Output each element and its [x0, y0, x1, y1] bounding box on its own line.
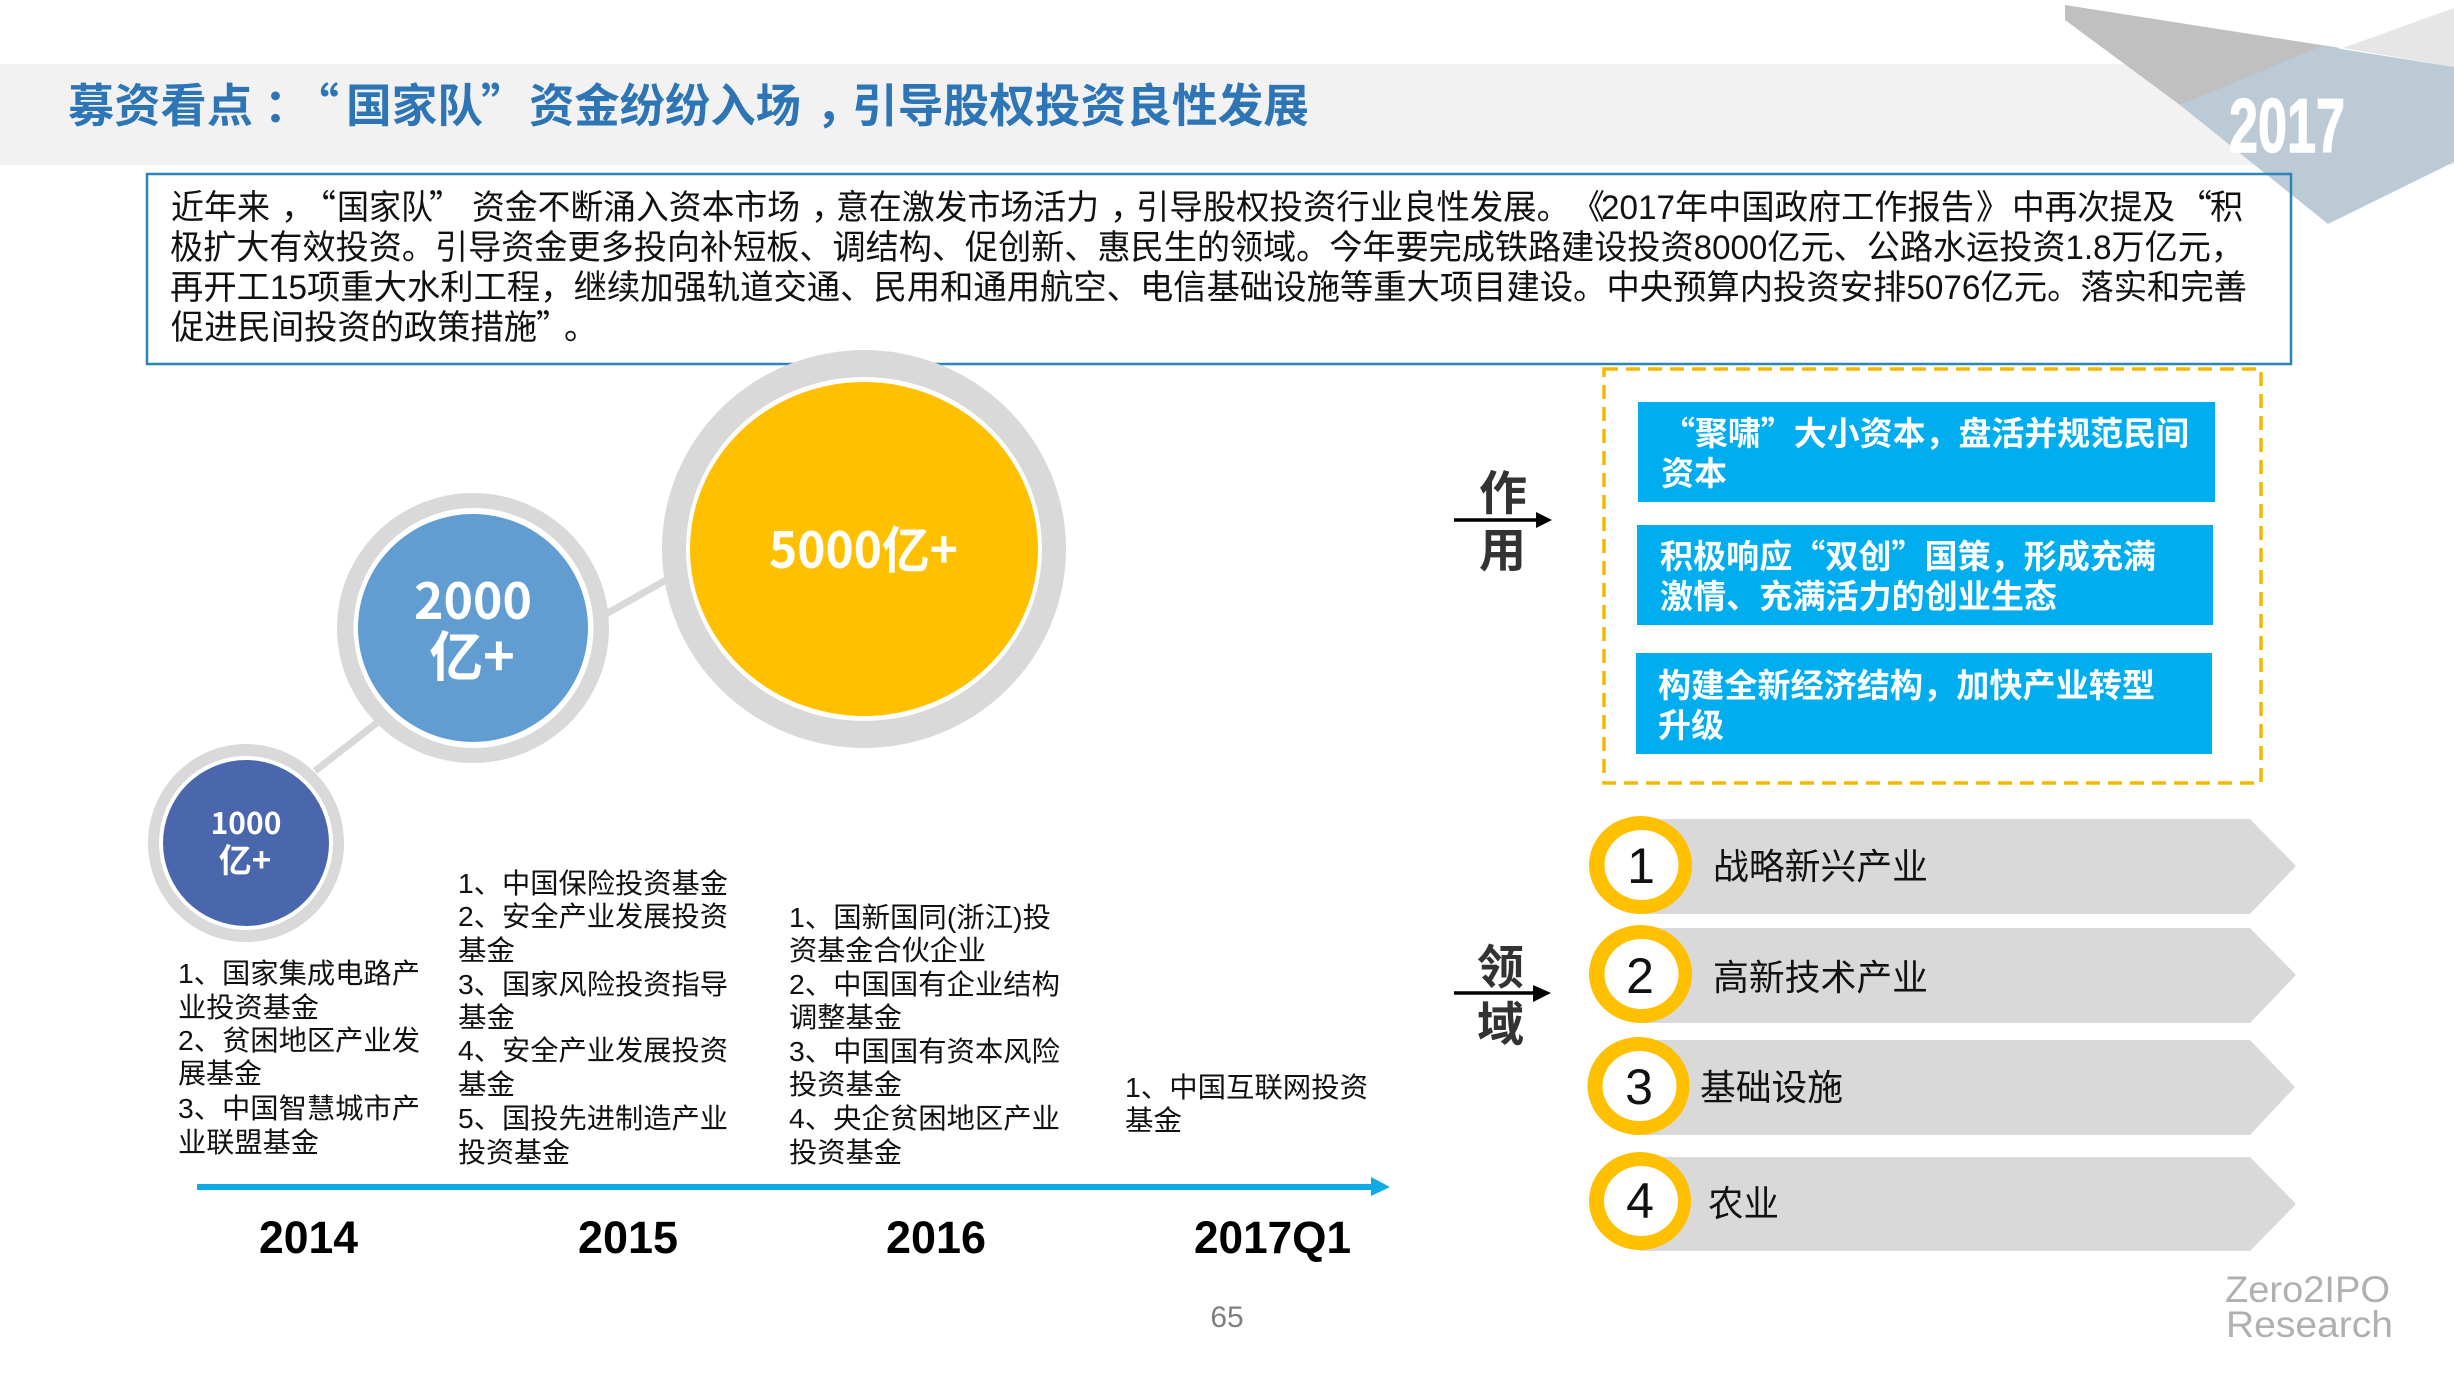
title: 资金纷纷入场 [529, 70, 801, 136]
logo: Zero2IPO Research: Research [2226, 1304, 2393, 1345]
fund list 2014: 2、贫困地区产业发 [178, 1025, 420, 1056]
title: “ [293, 70, 339, 136]
fund list 2015: 3、国家风险投资指导 [458, 969, 728, 1000]
sector row 4 [1589, 1152, 2296, 1251]
label: 作用 with arrow [1454, 455, 1552, 581]
intro paragraph [170, 180, 2247, 349]
fund list 2015: 基金 [458, 1002, 515, 1033]
label: 作用 with arrow: 用 [1479, 512, 1526, 581]
fund list 2016: 4、央企贫困地区产业 [789, 1103, 1060, 1134]
intro paragraph: “ [302, 180, 336, 229]
fund list 2016: 3、中国国有资本风险 [789, 1036, 1060, 1067]
fund list 2015: 2、安全产业发展投资 [458, 901, 728, 932]
title: 引导股权投资良性发展 [852, 70, 1309, 136]
timeline year labels [259, 1212, 1351, 1263]
fund list 2016: 资基金合伙企业 [789, 935, 986, 966]
intro paragraph: 再开工15项重大水利工程，继续加强轨道交通、民用和通用航空、电信基础设施等重大项目建设。中央预算内投资安排5076亿元。落实和完善 [170, 269, 2247, 307]
intro paragraph: ， [811, 180, 845, 229]
sector row 1: 战略新兴产业 [1713, 846, 1928, 887]
fund list 2016: 1、国新国同(浙江)投 [789, 902, 1051, 933]
decorative corner triangles [2065, 5, 2454, 224]
intro paragraph: 意在激发市场活力 [836, 189, 1099, 227]
fund list 2015: 基金 [458, 935, 515, 966]
title [68, 70, 1309, 136]
sector row 1: 1 [1627, 838, 1655, 894]
timeline year labels: 2015 [578, 1212, 678, 1263]
fund list 2016: 2、中国国有企业结构 [789, 969, 1060, 1000]
fund list 2014: 业联盟基金 [178, 1127, 319, 1158]
arrow: timeline [197, 1177, 1390, 1196]
timeline year labels: 2017Q1 [1194, 1212, 1351, 1263]
fund list 2017Q1: 1、中国互联网投资 [1125, 1072, 1368, 1103]
role card 2 [1637, 525, 2213, 625]
intro paragraph: ， [281, 180, 315, 229]
intro paragraph: 积 [2210, 189, 2243, 227]
fund list 2016: 投资基金 [789, 1069, 902, 1100]
intro paragraph: 促进民间投资的政策措施 [171, 309, 537, 347]
role card 2: 激情、充满活力的创业生态 [1660, 570, 2057, 618]
role card 3: 升级 [1658, 699, 1724, 747]
intro paragraph: ” [536, 300, 570, 349]
fund list 2017Q1: 基金 [1125, 1105, 1182, 1136]
title: ： [264, 70, 310, 136]
sector row 3: 基础设施 [1700, 1067, 1843, 1108]
fund list 2016: 调整基金 [789, 1002, 902, 1033]
timeline year labels: 2016 [886, 1212, 986, 1263]
sector row 4: 4 [1626, 1173, 1654, 1229]
intro paragraph: ， [1110, 180, 1144, 229]
fund list 2015: 基金 [458, 1069, 515, 1100]
role card 3 [1636, 653, 2212, 754]
fund list 2015: 1、中国保险投资基金 [458, 868, 728, 899]
bubble: 5000亿+ [662, 350, 1066, 748]
intro paragraph: ” [429, 180, 463, 229]
fund list 2015: 4、安全产业发展投资 [458, 1035, 728, 1066]
role card 1: 资本 [1661, 447, 1727, 495]
year badge 2017: 2017 [2229, 84, 2345, 169]
fund list 2015: 5、国投先进制造产业 [458, 1103, 728, 1134]
bubble: 1000亿+ [148, 744, 344, 942]
sector row 3: 3 [1625, 1059, 1653, 1115]
sector row 4: 农业 [1708, 1183, 1779, 1224]
title: 募资看点 [68, 70, 253, 136]
fund list 2016: 投资基金 [789, 1137, 902, 1168]
intro paragraph: “ [2178, 180, 2212, 229]
sector row 3 [1588, 1037, 2295, 1135]
logo: Zero2IPO Research: Zero2IPO [2225, 1269, 2390, 1310]
label: 领域 with arrow [1454, 929, 1551, 1055]
role card 1: “聚啸”大小资本，盘活并规范民间 [1662, 407, 2189, 455]
header band [0, 64, 2454, 165]
fund list 2014: 3、中国智慧城市产 [178, 1093, 420, 1124]
bubble: 1000亿+: 亿+ [219, 834, 271, 882]
panel: roles dashed box [1604, 369, 2261, 783]
chart: growing investment bubbles [148, 350, 1066, 942]
label: 作用 with arrow: 作 [1479, 455, 1527, 524]
role card 1 [1638, 402, 2215, 502]
fund list 2015: 投资基金 [458, 1137, 570, 1168]
label: 领域 with arrow: 领 [1477, 929, 1524, 998]
sector row 2 [1589, 925, 2296, 1023]
intro paragraph: 资金不断涌入资本市场 [472, 189, 800, 227]
sector row 2: 2 [1626, 948, 1654, 1004]
bubble: 5000亿+: 5000亿+ [769, 511, 958, 583]
label: 领域 with arrow: 域 [1477, 986, 1524, 1055]
sector row 1 [1589, 816, 2296, 914]
fund list 2014 [178, 958, 420, 1158]
intro paragraph: 近年来 [171, 189, 270, 227]
title: 国家队 [346, 70, 483, 136]
fund list 2017Q1 [1125, 1072, 1368, 1136]
intro paragraph: 》 [1976, 180, 2010, 229]
fund list 2014: 展基金 [178, 1058, 262, 1089]
fund list 2016 [789, 902, 1060, 1168]
logo: Zero2IPO Research [2225, 1269, 2393, 1345]
sector row 2: 高新技术产业 [1713, 957, 1928, 998]
intro paragraph: 国家队 [337, 189, 433, 227]
fund list 2015 [458, 868, 728, 1168]
fund list 2014: 业投资基金 [178, 992, 319, 1023]
panel: intro text box [147, 174, 2291, 364]
intro paragraph: 2017年中国政府工作报告 [1601, 189, 1974, 227]
intro paragraph: 《 [1571, 180, 1605, 229]
intro paragraph: 中再次提及 [2012, 189, 2175, 227]
bubble: 2000亿+: 亿+ [429, 613, 515, 692]
fund list 2014: 1、国家集成电路产 [178, 958, 420, 989]
intro paragraph: 引导股权投资行业良性发展。 [1136, 180, 1570, 229]
bubble: 2000亿+ [337, 493, 609, 763]
page number: 65 [1210, 1301, 1244, 1334]
title: ” [481, 70, 527, 136]
role card 3: 构建全新经济结构，加快产业转型 [1658, 659, 2155, 707]
role card 2: 积极响应“双创”国策，形成充满 [1660, 530, 2156, 578]
timeline year labels: 2014 [259, 1212, 358, 1263]
bubble: 1000亿+: 1000 [211, 799, 281, 843]
bubble: 2000亿+: 2000 [414, 562, 532, 634]
intro paragraph: 。 [564, 300, 598, 349]
intro paragraph: 极扩大有效投资。引导资金更多投向补短板、调结构、促创新、惠民生的领域。今年要完成铁路建设投资8000亿元、公路水运投资1.8万亿元， [170, 229, 2244, 267]
title: ， [816, 70, 862, 136]
